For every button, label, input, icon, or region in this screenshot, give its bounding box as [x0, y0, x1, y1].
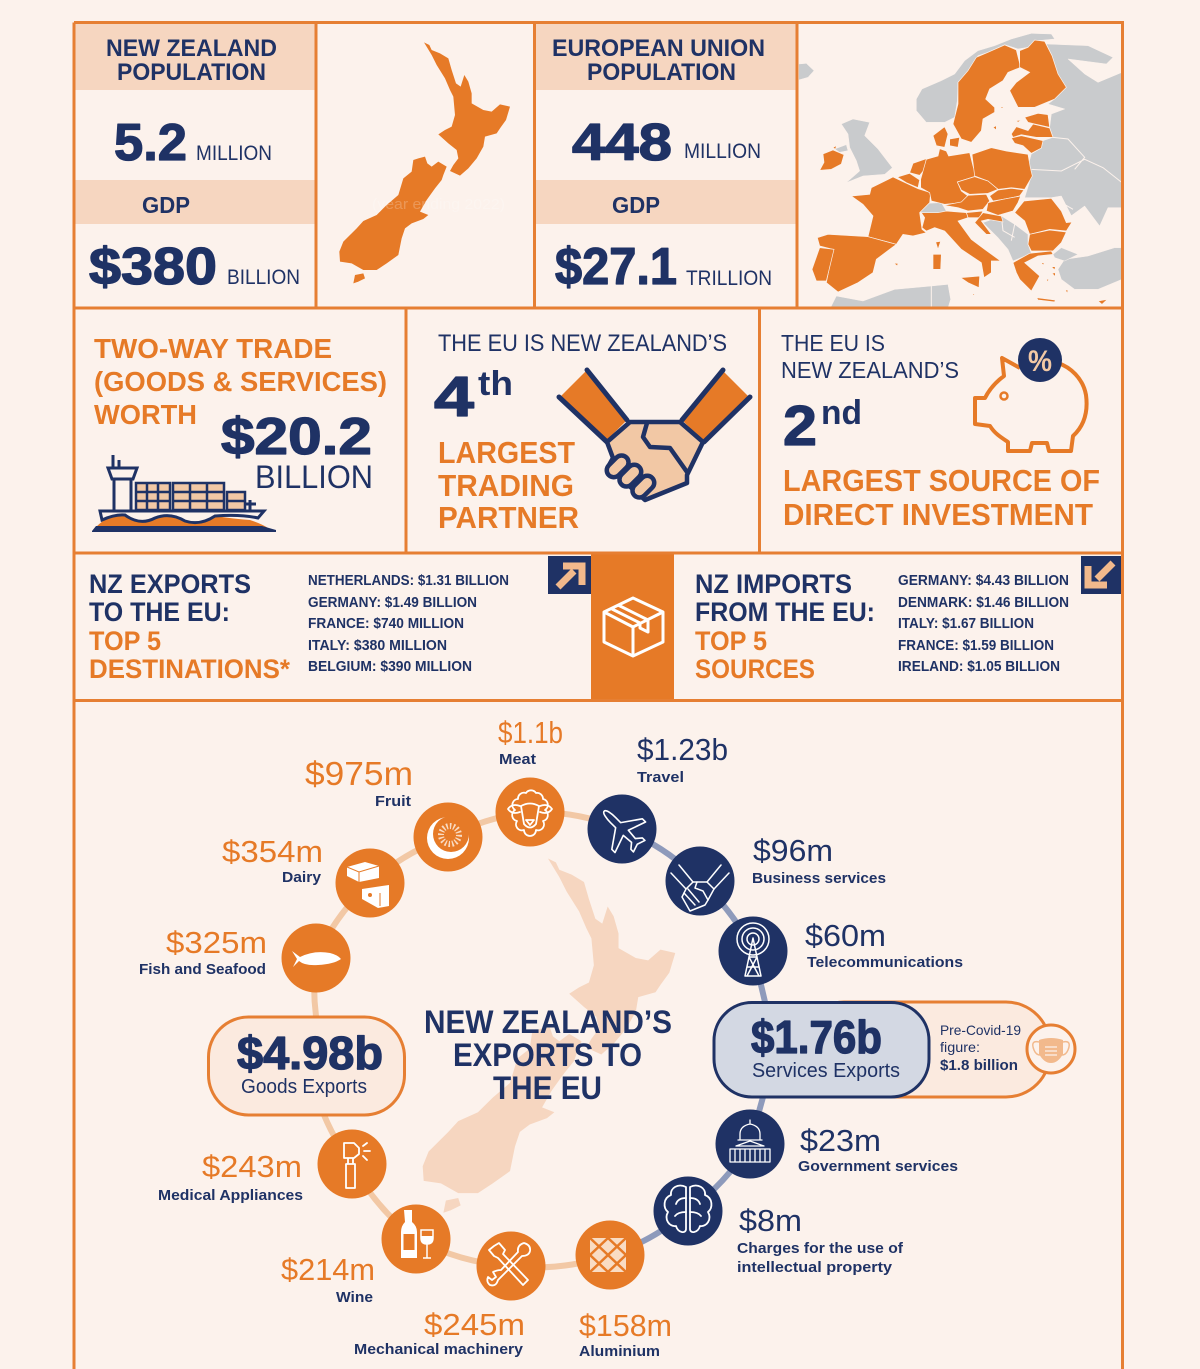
item: charges for intellectual property	[654, 1176, 904, 1276]
heading: top 5 sources: FROM THE EU:	[695, 597, 875, 627]
callout: services exports $1.76b with pre-Covid figure: figure:	[940, 1039, 980, 1055]
map: New Zealand: (year ending 2022)	[372, 196, 505, 213]
panel: European Union facts	[536, 24, 796, 296]
item: travel: $1.23b	[637, 732, 728, 767]
callout: goods exports $4.98b: Goods Exports	[241, 1076, 367, 1098]
text: the EU is New Zealand's: NEW ZEALAND’S	[781, 357, 959, 383]
item: wine	[281, 1204, 450, 1306]
item: charges for intellectual property: $8m	[739, 1203, 802, 1238]
icon: import arrow	[1081, 556, 1122, 594]
callout: services exports $1.76b with pre-Covid figure	[714, 1002, 1075, 1097]
figure: population 5.2 million	[114, 114, 272, 172]
figure: EU GDP $27.1 trillion: TRILLION	[686, 267, 772, 290]
item: telecommunications: Telecommunications	[807, 954, 963, 971]
icon: piggy bank with percent coin	[975, 338, 1087, 451]
item: medical appliances: $243m	[202, 1149, 302, 1184]
item: fish and seafood: Fish and Seafood	[139, 961, 266, 978]
heading: New Zealand population: NEW ZEALAND	[106, 35, 277, 62]
figure: population 448 million: MILLION	[684, 140, 761, 163]
text: the EU is New Zealand's: THE EU IS	[781, 330, 885, 356]
text: largest trading partner: LARGEST	[438, 435, 575, 470]
item: telecommunications	[718, 916, 963, 986]
icon: piggy bank with percent coin: %	[1028, 345, 1052, 378]
title: New Zealand's exports to the EU: EXPORTS TO	[453, 1037, 642, 1073]
map: New Zealand	[339, 42, 510, 283]
heading: top 5 destinations: TOP 5	[89, 626, 161, 656]
item: fruit	[305, 755, 482, 872]
panel: 2nd largest direct investment	[781, 330, 1100, 532]
callout: goods exports $4.98b: $4.98b	[237, 1027, 383, 1079]
text: largest source of direct investment: LARGEST SOURCE OF	[783, 463, 1100, 498]
figure: 2nd: 2	[783, 394, 817, 458]
list: import sources: IRELAND: $1.05 BILLION	[898, 659, 1060, 675]
heading: top 5 sources: NZ IMPORTS	[695, 569, 852, 599]
figure: 2nd: nd	[821, 394, 862, 432]
icon: export arrow	[548, 556, 591, 594]
figure: population 448 million	[572, 114, 761, 172]
text: largest trading partner: PARTNER	[438, 500, 579, 535]
title: New Zealand's exports to the EU: NEW ZEALAND’S	[424, 1004, 672, 1040]
heading: two-way trade worth	[94, 333, 387, 430]
figure: NZ GDP $380 billion	[89, 238, 300, 296]
figure: EU GDP $27.1 trillion: $27.1	[555, 238, 677, 296]
panel: NZ exports to the EU	[89, 556, 591, 684]
list: export destinations: BELGIUM: $390 MILLION	[308, 659, 472, 675]
item: wine: $214m	[281, 1252, 375, 1287]
text: largest source of direct investment: DIRECT INVESTMENT	[783, 497, 1093, 532]
heading: top 5 destinations: DESTINATIONS*	[89, 654, 290, 684]
item: medical appliances: Medical Appliances	[158, 1187, 303, 1204]
item: mechanical machinery: Mechanical machinery	[354, 1341, 524, 1358]
heading: EU population: POPULATION	[587, 59, 736, 86]
item: aluminium	[576, 1220, 672, 1360]
heading: top 5 destinations: NZ EXPORTS	[89, 569, 251, 599]
heading: New Zealand population	[106, 35, 277, 86]
figure: 4th: th	[478, 365, 513, 403]
heading: top 5 destinations	[89, 569, 290, 684]
figure: 2nd	[783, 394, 862, 458]
title: New Zealand's exports to the EU	[424, 1004, 672, 1106]
figure: $20.2 billion: $20.2	[221, 408, 372, 466]
item: business services: Business services	[752, 870, 886, 887]
text: largest trading partner: TRADING	[438, 468, 574, 503]
heading: two-way trade worth: WORTH	[94, 399, 197, 430]
item: telecommunications: $60m	[805, 918, 886, 953]
figure: NZ GDP $380 billion: BILLION	[227, 266, 300, 289]
item: business services	[666, 833, 886, 916]
text: largest source of direct investment	[783, 463, 1100, 532]
panel: 4th largest trading partner	[434, 330, 750, 535]
heading: EU GDP: GDP	[612, 192, 660, 218]
heading: two-way trade worth: (GOODS & SERVICES)	[94, 366, 387, 397]
item: government services: Government services	[798, 1158, 958, 1175]
heading: two-way trade worth: TWO-WAY TRADE	[94, 333, 332, 364]
callout: services exports $1.76b with pre-Covid figure: $1.8 billion	[940, 1057, 1018, 1074]
item: aluminium: $158m	[579, 1308, 672, 1343]
item: dairy: $354m	[222, 834, 323, 869]
figure: 4th	[434, 365, 513, 429]
heading: top 5 sources: TOP 5	[695, 626, 767, 656]
heading: New Zealand population: POPULATION	[117, 59, 266, 86]
figure: $20.2 billion	[221, 408, 373, 495]
callout: services exports $1.76b with pre-Covid figure: Pre-Covid-19	[940, 1022, 1021, 1038]
icon: parcel box	[591, 553, 674, 700]
icon: container ship	[92, 455, 276, 532]
item: travel: Travel	[637, 769, 684, 786]
item: meat: Meat	[499, 751, 536, 768]
item: fruit: $975m	[305, 755, 413, 792]
list: import sources: DENMARK: $1.46 BILLION	[898, 595, 1069, 611]
item: medical appliances	[158, 1130, 386, 1204]
list: import sources: FRANCE: $1.59 BILLION	[898, 638, 1054, 654]
icon: handshake	[559, 370, 750, 500]
item: meat	[496, 715, 564, 846]
item: meat: $1.1b	[498, 715, 563, 750]
figure: population 5.2 million: 5.2	[114, 114, 187, 172]
title: New Zealand's exports to the EU: THE EU	[493, 1070, 602, 1106]
list: import sources: GERMANY: $4.43 BILLION	[898, 573, 1069, 589]
list: export destinations: ITALY: $380 MILLION	[308, 638, 447, 654]
item: dairy: Dairy	[282, 869, 322, 886]
item: fish and seafood: $325m	[166, 925, 267, 960]
item: fish and seafood	[139, 924, 350, 992]
figure: EU GDP $27.1 trillion	[555, 238, 772, 296]
item: business services: $96m	[753, 833, 833, 868]
figure: population 5.2 million: MILLION	[196, 142, 272, 165]
item: government services: $23m	[800, 1123, 881, 1158]
item: dairy	[222, 834, 404, 918]
item: charges for intellectual property: Charges for the use of	[737, 1240, 904, 1257]
list: export destinations: NETHERLANDS: $1.31 BILLION	[308, 573, 509, 589]
figure: population 448 million: 448	[572, 114, 672, 172]
figure: NZ GDP $380 billion: $380	[89, 238, 217, 296]
heading: EU population	[552, 35, 765, 86]
item: mechanical machinery: $245m	[424, 1307, 525, 1342]
callout: services exports $1.76b with pre-Covid figure: $1.76b	[751, 1011, 882, 1063]
item: government services	[716, 1110, 958, 1178]
heading: top 5 destinations: TO THE EU:	[89, 597, 230, 627]
text: the EU is New Zealand's	[781, 330, 959, 383]
item: travel	[588, 732, 728, 864]
item: charges for intellectual property: intellectual property	[737, 1259, 893, 1276]
ring connector: services exports	[610, 829, 765, 1255]
callout: services exports $1.76b with pre-Covid figure: Services Exports	[752, 1060, 900, 1082]
panel: NZ imports from the EU	[695, 556, 1122, 684]
heading: EU population: EUROPEAN UNION	[552, 35, 765, 62]
list: export destinations: GERMANY: $1.49 BILLION	[308, 595, 477, 611]
list: export destinations: FRANCE: $740 MILLION	[308, 616, 464, 632]
figure: $20.2 billion: BILLION	[255, 459, 373, 495]
item: wine: Wine	[336, 1289, 373, 1306]
heading: NZ GDP: GDP	[142, 192, 190, 218]
ring connector: goods exports	[314, 812, 622, 1267]
list: import sources	[898, 573, 1069, 675]
heading: top 5 sources: SOURCES	[695, 654, 815, 684]
list: import sources: ITALY: $1.67 BILLION	[898, 616, 1034, 632]
panel: two-way trade	[92, 333, 387, 532]
item: fruit: Fruit	[375, 793, 411, 810]
map: Europe with EU members highlighted	[799, 33, 1122, 308]
callout: goods exports $4.98b	[208, 1017, 404, 1115]
text: largest trading partner	[438, 435, 579, 535]
item: mechanical machinery	[354, 1232, 546, 1358]
map: faint New Zealand behind title	[423, 858, 675, 1213]
panel: New Zealand facts	[75, 24, 315, 296]
heading: top 5 sources	[695, 569, 875, 684]
item: aluminium: Aluminium	[579, 1343, 660, 1360]
figure: 4th: 4	[434, 365, 474, 429]
list: export destinations	[308, 573, 509, 675]
text: the EU is New Zealand's: THE EU IS NEW ZEALAND’S	[438, 330, 727, 357]
